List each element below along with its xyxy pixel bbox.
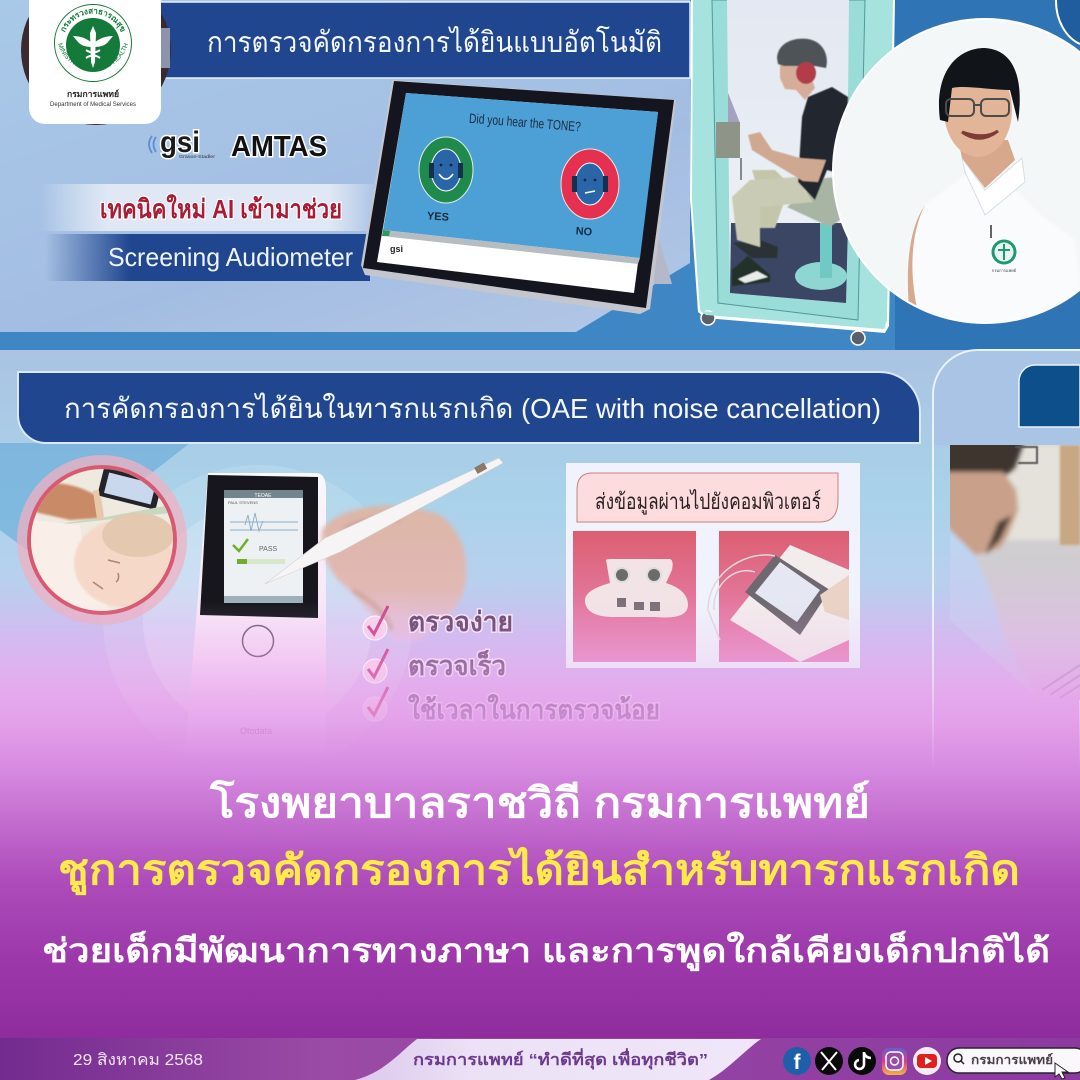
icon: cursor xyxy=(1055,1063,1068,1079)
photo: device with printout xyxy=(708,531,849,662)
yes face button xyxy=(419,137,473,224)
far leg xyxy=(752,170,790,228)
item: easy to test xyxy=(363,606,513,640)
panel: lower background xyxy=(0,350,1080,775)
icon: instagram xyxy=(882,1048,907,1075)
photo: circle behind logo xyxy=(21,0,171,125)
card heading: ส่งข้อมูลผ่านไปยังคอมพิวเตอร์ xyxy=(595,489,821,515)
header stub xyxy=(1019,365,1080,427)
illustration: hearing test booth xyxy=(690,0,895,345)
no face button xyxy=(561,149,619,239)
label band: screening audiometer xyxy=(45,234,370,281)
header: automatic hearing screening xyxy=(160,2,690,78)
hand xyxy=(322,506,466,640)
illustration: OAE handheld device with stylus: PAUL STEVENS xyxy=(228,500,258,505)
no face button: NO xyxy=(575,225,593,239)
illustration: AMTAS tablet xyxy=(361,80,676,314)
door frame xyxy=(712,0,865,320)
photo: device base xyxy=(573,531,696,662)
icon: ministry seal: กระทรวงสาธารณสุข xyxy=(61,8,126,32)
icon: gsi logo: gsi xyxy=(160,126,200,159)
glass xyxy=(727,0,849,303)
seat under person xyxy=(787,177,840,227)
card heading xyxy=(577,473,838,522)
headline: hospital name: โรงพยาบาลราชวิถี กรมการแพทย์ xyxy=(209,779,870,826)
panel: right side panel xyxy=(933,350,1080,770)
brand: gsi AMTAS xyxy=(149,126,327,163)
gradient overlay xyxy=(0,350,1080,1040)
logo card: กรมการแพทย์ xyxy=(67,89,119,99)
panel: data transfer card xyxy=(566,463,860,668)
header: newborn hearing screening xyxy=(18,372,920,443)
shirt xyxy=(907,175,1080,340)
search pill xyxy=(947,1048,1080,1079)
illustration: OAE handheld device with stylus: PASS xyxy=(259,546,277,553)
item: takes little time: ใช้เวลาในการตรวจน้อย xyxy=(408,694,660,725)
search pill: กรมการแพทย์ xyxy=(971,1053,1053,1067)
near leg xyxy=(732,177,813,247)
floor xyxy=(730,223,848,303)
yes face button: YES xyxy=(427,210,449,224)
person xyxy=(732,39,848,286)
illustration: OAE handheld device with stylus: Otodata xyxy=(240,726,272,736)
panel: upper background xyxy=(0,0,1080,350)
neck and face xyxy=(958,140,1015,188)
arm xyxy=(748,132,826,182)
icon: facebook: f xyxy=(794,1051,802,1074)
test panel xyxy=(716,93,741,180)
neck and face xyxy=(780,60,815,100)
label band: new AI technique xyxy=(40,184,380,231)
icon: gsi logo: Grason-Stadler xyxy=(179,154,216,159)
header: newborn hearing screening: การคัดกรองการได้ยินในทารกแรกเกิด (OAE with noise cancellation) xyxy=(64,392,881,424)
icon: gsi logo xyxy=(149,126,216,159)
brand: gsi AMTAS: AMTAS xyxy=(231,131,327,163)
device button xyxy=(242,626,274,656)
logo card xyxy=(29,0,161,124)
headline: newborn hearing screening: ชูการตรวจคัดกรองการได้ยินสำหรับทารกแรกเกิด xyxy=(58,846,1020,896)
slogan ribbon xyxy=(355,1039,761,1080)
icon: youtube xyxy=(913,1047,941,1075)
item: quick to test xyxy=(363,648,506,683)
illustration: OAE handheld device with stylus: TEOAE xyxy=(255,493,272,499)
subheadline: ช่วยเด็กมีพัฒนาการทางภาษา และการพูดใกล้เคียงเด็กปกติได้ xyxy=(42,930,1050,972)
shirt badge xyxy=(993,241,1015,263)
photo: doctor at computer xyxy=(945,440,1080,705)
kickstand xyxy=(640,215,672,284)
label band: screening audiometer: Screening Audiometer xyxy=(108,242,353,272)
checklist xyxy=(363,606,660,725)
icon: X xyxy=(815,1047,843,1075)
shirt xyxy=(798,87,848,200)
illustration: OAE handheld device with stylus xyxy=(185,458,503,755)
earmuff xyxy=(796,62,816,84)
shoe xyxy=(732,256,770,286)
label band: new AI technique: เทคนิคใหม่ AI เข้ามาช่วย xyxy=(100,194,342,224)
icon: ministry seal xyxy=(54,4,132,82)
icon: facebook xyxy=(783,1047,811,1075)
footer bar xyxy=(0,1038,1080,1080)
photo: newborn hearing test xyxy=(17,455,187,625)
illustration: AMTAS tablet: gsi xyxy=(390,244,403,254)
photo: doctor portrait xyxy=(832,18,1080,324)
stylus xyxy=(265,458,503,584)
icon: tiktok xyxy=(848,1047,876,1075)
header: automatic hearing screening: การตรวจคัดกรองการได้ยินแบบอัตโนมัติ xyxy=(207,25,662,59)
item: quick to test: ตรวจเร็ว xyxy=(408,648,506,681)
hair xyxy=(777,39,827,68)
caster wheels xyxy=(700,311,886,345)
item: takes little time xyxy=(363,687,660,725)
item: easy to test: ตรวจง่าย xyxy=(408,607,513,637)
logo card: Department of Medical Services xyxy=(50,102,136,108)
stool xyxy=(795,223,847,290)
slogan ribbon: กรมการแพทย์ “ทำดีที่สุด เพื่อทุกชีวิต” xyxy=(413,1048,708,1070)
question text: Did you hear the TONE? xyxy=(469,111,581,134)
photo: doctor portrait: กรมการแพทย์ xyxy=(992,268,1016,273)
icon: ministry seal: MINISTRY OF PUBLIC HEALTH xyxy=(58,43,128,66)
rear shoe xyxy=(733,240,778,258)
date: 29 สิงหาคม 2568 xyxy=(73,1052,203,1069)
